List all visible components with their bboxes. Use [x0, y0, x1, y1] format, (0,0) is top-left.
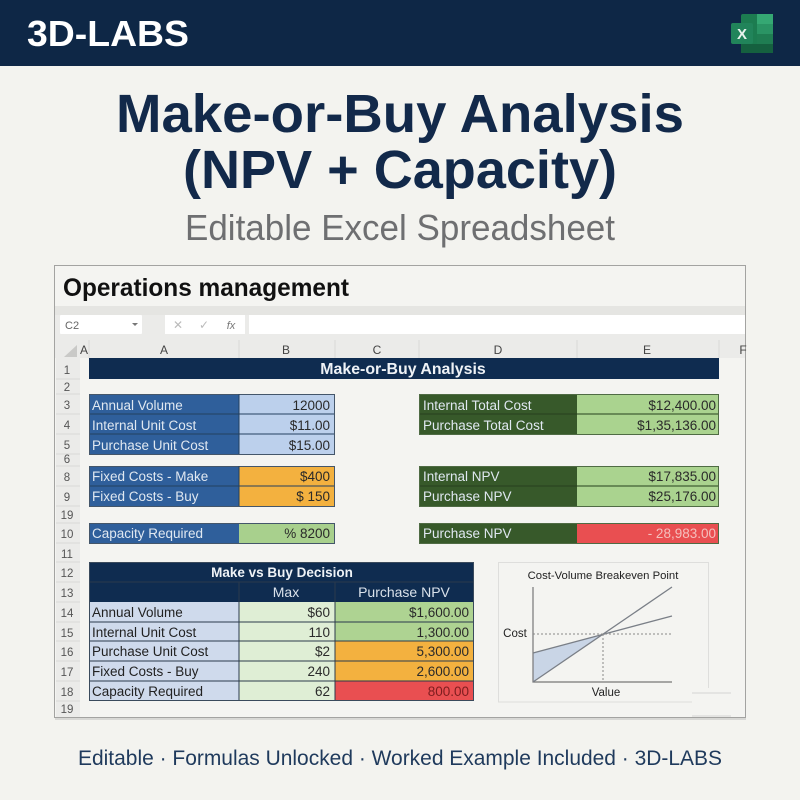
row headers: 9	[64, 492, 70, 504]
input table: fixed costs: $400	[300, 469, 330, 484]
input table: volume and unit costs	[89, 394, 335, 454]
chart: cost-volume breakeven: Cost-Volume Breakeven Point	[528, 570, 679, 582]
icon: Excel logo: X	[737, 26, 747, 43]
output table: total costs: Internal Total Cost	[423, 398, 532, 413]
decision table: 110	[308, 625, 330, 640]
input table: volume and unit costs: 12000	[292, 398, 330, 413]
output table: total costs: Purchase Total Cost	[423, 418, 544, 433]
output table: NPV: $17,835.00	[648, 469, 716, 484]
column headers	[55, 334, 747, 358]
output table: total costs: $12,400.00	[648, 398, 716, 413]
title: Make-or-Buy Analysis	[116, 84, 684, 144]
output table: total costs: $1,35,136.00	[637, 418, 716, 433]
sheet title banner: Make-or-Buy Analysis	[320, 361, 486, 378]
input table: volume and unit costs: Annual Volume	[92, 398, 183, 413]
column headers: A	[80, 343, 88, 357]
input table: fixed costs: Fixed Costs - Make	[92, 469, 208, 484]
footer tagline: Editable · Formulas Unlocked · Worked Example Included · 3D-LABS	[78, 747, 722, 770]
decision table: Make vs Buy Decision	[211, 565, 353, 580]
decision table: Purchase NPV	[358, 584, 451, 600]
row headers: 13	[61, 588, 73, 600]
decision table: 800.00	[428, 684, 469, 699]
decision table: Capacity Required	[92, 684, 203, 699]
row headers: 1	[64, 365, 70, 377]
output table: NPV	[419, 466, 719, 506]
input table: volume and unit costs: Purchase Unit Cost	[92, 438, 209, 453]
row headers: 19	[61, 510, 73, 522]
column headers: B	[282, 343, 290, 357]
output table: NPV: $25,176.00	[648, 489, 716, 504]
chart: cost-volume breakeven: Cost	[503, 628, 528, 640]
row headers: 12	[61, 568, 73, 580]
output table: negative NPV: Purchase NPV	[423, 526, 512, 541]
title	[116, 84, 684, 200]
decision table: 62	[315, 684, 330, 699]
row headers: 5	[64, 440, 70, 452]
column headers: C	[373, 343, 382, 357]
row headers: 16	[61, 647, 73, 659]
row headers: 3	[64, 400, 70, 412]
column headers: F	[739, 343, 747, 357]
formula bar: ✕	[173, 318, 183, 332]
column headers: A	[160, 343, 168, 357]
row headers: 10	[61, 529, 73, 541]
formula bar: ✓	[199, 318, 209, 332]
row headers: 4	[64, 420, 71, 432]
decision table: 1,300.00	[416, 625, 469, 640]
formula bar	[55, 306, 745, 334]
decision table: $2	[315, 644, 330, 659]
output table: NPV: Purchase NPV	[423, 489, 512, 504]
decision table: Purchase Unit Cost	[92, 644, 209, 659]
chart: cost-volume breakeven	[498, 562, 731, 716]
formula bar: C2	[65, 320, 79, 332]
input table: fixed costs: Fixed Costs - Buy	[92, 489, 199, 504]
input table: volume and unit costs: Internal Unit Cost	[92, 418, 197, 433]
row headers	[56, 358, 80, 717]
row headers: 11	[61, 549, 73, 561]
decision table	[89, 562, 474, 701]
row headers: 14	[61, 608, 74, 620]
row headers: 19	[61, 704, 73, 716]
output table: negative NPV: - 28,983.00	[648, 526, 716, 541]
chart: cost-volume breakeven: Value	[592, 687, 620, 699]
output table: NPV: Internal NPV	[423, 469, 500, 484]
input table: fixed costs: $ 150	[296, 489, 330, 504]
input table: capacity	[89, 523, 335, 544]
input table: volume and unit costs: $11.00	[290, 418, 330, 433]
input table: capacity: % 8200	[284, 526, 330, 541]
output table: total costs	[419, 394, 719, 434]
formula bar: fx	[227, 320, 236, 332]
subtitle: Editable Excel Spreadsheet	[185, 207, 615, 248]
decision table: $60	[307, 605, 330, 620]
row headers: 2	[64, 382, 70, 394]
decision table: 240	[307, 664, 330, 679]
decision table: Max	[273, 584, 299, 600]
row headers: 8	[64, 472, 70, 484]
output table: negative NPV	[419, 523, 719, 544]
decision table: 5,300.00	[416, 644, 469, 659]
row headers: 18	[61, 687, 73, 699]
title: (NPV + Capacity)	[183, 140, 617, 200]
column headers: D	[494, 343, 503, 357]
input table: volume and unit costs: $15.00	[289, 438, 330, 453]
brand name: 3D-LABS	[27, 13, 189, 54]
sheet heading: Operations management	[63, 274, 350, 302]
icon: Excel logo	[731, 14, 773, 53]
sheet title banner	[89, 358, 719, 379]
decision table: $1,600.00	[409, 605, 469, 620]
row headers: 17	[61, 667, 73, 679]
input table: fixed costs	[89, 466, 335, 506]
panel: spreadsheet window	[54, 266, 747, 720]
decision table: 2,600.00	[416, 664, 469, 679]
decision table: Fixed Costs - Buy	[92, 664, 199, 679]
column headers: E	[643, 343, 651, 357]
input table: capacity: Capacity Required	[92, 526, 203, 541]
row headers: 6	[64, 454, 70, 466]
row headers: 15	[61, 628, 73, 640]
header bar	[0, 0, 800, 66]
decision table: Internal Unit Cost	[92, 625, 197, 640]
decision table: Annual Volume	[92, 605, 183, 620]
